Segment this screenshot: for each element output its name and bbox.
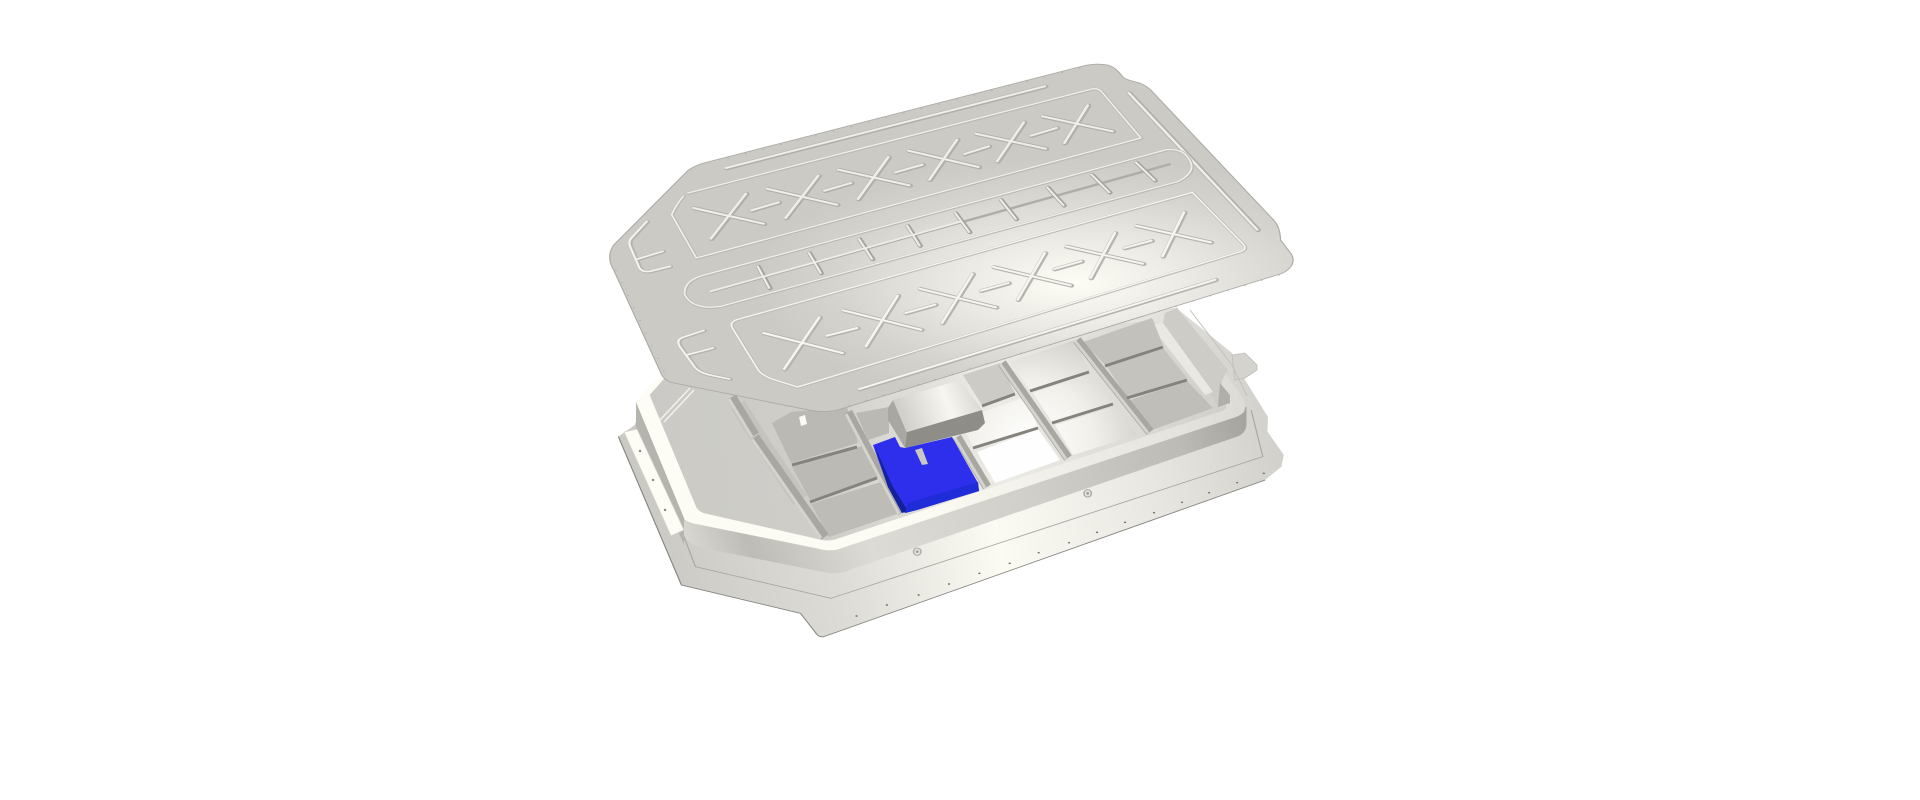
right inner wall [1163,308,1228,407]
module column 4 [1083,318,1163,365]
module column 2 [963,363,1015,405]
module row: left [772,407,858,463]
white tray rim [635,307,1245,550]
grey control box [888,380,985,448]
middle channel emboss [685,149,1192,307]
tray body [618,307,1284,637]
right rim edge [1190,310,1247,396]
module behind blue [856,407,889,440]
tray outer wall [684,407,1246,573]
right connector tab [1232,353,1257,380]
flange seam line [681,410,1263,598]
blue battery module [873,437,979,513]
lid [610,64,1293,412]
right white strip [1150,323,1213,395]
flange outer edge [618,437,1265,637]
rails [732,340,1150,537]
tray flange [618,308,1284,637]
small white notch [799,415,807,426]
lid rivets [616,67,1279,408]
left white strip [624,429,684,536]
tray floor [650,320,1227,540]
left rail wide base [738,405,800,500]
corner embossed marks [629,221,730,379]
left rim detail lines [660,388,694,422]
bottom panel emboss [731,192,1245,389]
lower tray [618,307,1284,637]
dark gaps [792,347,1187,502]
battery modules grid [729,318,1213,538]
left dark wall [636,402,684,545]
bolt: left [913,548,921,555]
top panel emboss [672,86,1258,258]
right slot [1218,383,1230,407]
rail highlights [729,341,1148,538]
bolt: right [1084,490,1091,497]
module column 3 [1010,340,1089,390]
flange rivets [857,473,1264,616]
lid plate [610,64,1293,412]
